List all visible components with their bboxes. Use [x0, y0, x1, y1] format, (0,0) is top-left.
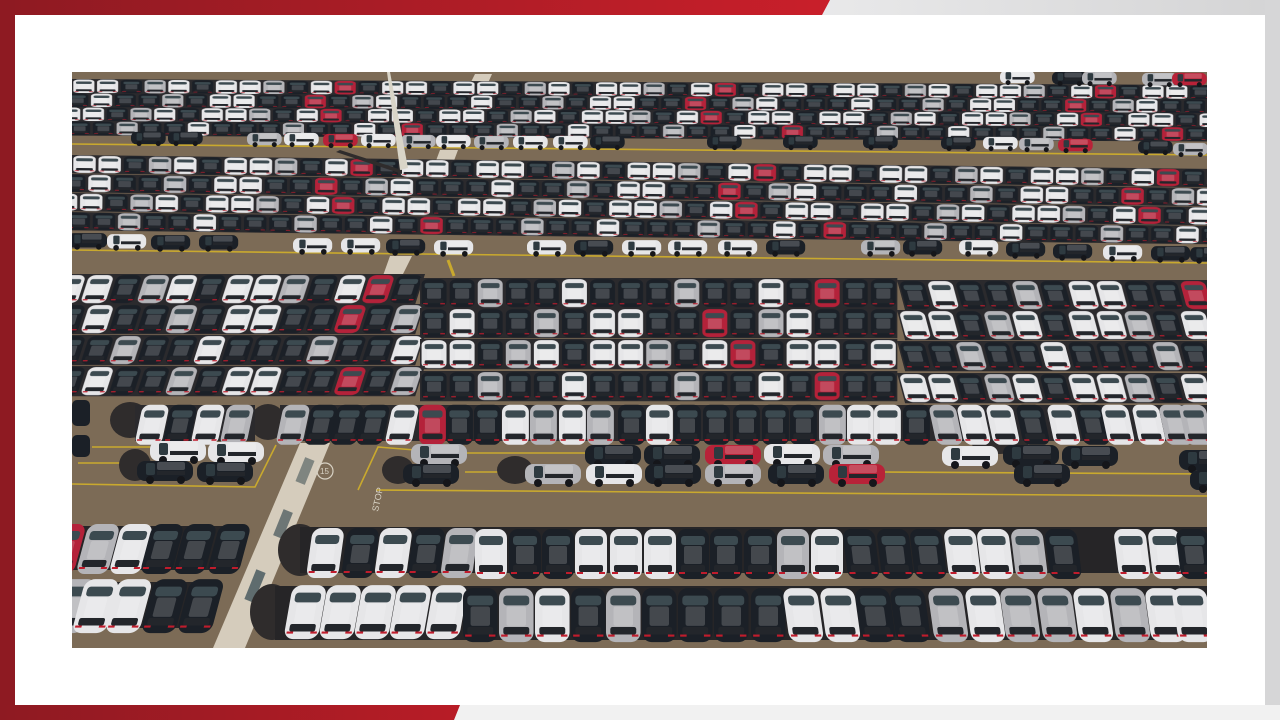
bottom row 1: shadow band left [72, 526, 237, 570]
bottom row 2: cars centre-left [283, 585, 468, 639]
frame: grey top bar [820, 0, 1280, 15]
lamp pole [387, 72, 408, 170]
block B: second group of rows [72, 155, 1207, 244]
photo: aerial view of parked cars [41, 71, 1280, 648]
bottom row 1: cars centre-left [306, 528, 479, 578]
bottom row 2: shadow band left [106, 582, 192, 628]
frame: red top bar [0, 0, 830, 15]
frame: light bottom bar [450, 705, 1280, 720]
lot shadows [110, 402, 1030, 640]
frame: red bottom bar [0, 705, 460, 720]
yellow parking lines [72, 144, 1207, 496]
road marking: stop text: STOP [370, 487, 385, 512]
road marking: circle sign [317, 463, 333, 479]
block C: four central rows [50, 274, 1242, 403]
frame: grey right bar [1265, 0, 1280, 720]
road marking: circle sign: 15 [320, 467, 329, 476]
bottom row 2: cars centre [463, 588, 786, 642]
bottom row 1: cars centre [475, 529, 843, 579]
frame: red left bar [0, 0, 15, 720]
bottom row 2: cars right [782, 588, 1213, 642]
bottom row 1: cars right [842, 529, 1213, 579]
bottom row 1: shadow band right [300, 527, 1207, 573]
asphalt ground [72, 72, 1207, 648]
bottom row 1: cars left [72, 524, 250, 574]
block A: far rows of cars [58, 79, 1280, 142]
bottom row 2: shadow band right [275, 586, 1207, 640]
side-parked row 2 [68, 233, 1229, 264]
side-parked row 1 [131, 132, 1208, 157]
bottom row 2: cars left [72, 579, 223, 634]
left edge dark cars [72, 400, 90, 457]
row 5: shadow band right [280, 405, 1207, 441]
pedestrian crossing strips [213, 74, 492, 648]
row 5: shadow band [135, 405, 255, 441]
far top strip cars [1000, 71, 1207, 87]
lamp pole shadow [336, 150, 402, 174]
row 5: cars centre [419, 405, 930, 445]
side-parked cars in central lot [137, 441, 1246, 493]
row 5: cars right [928, 405, 1214, 445]
row 5: cars left [134, 405, 420, 445]
